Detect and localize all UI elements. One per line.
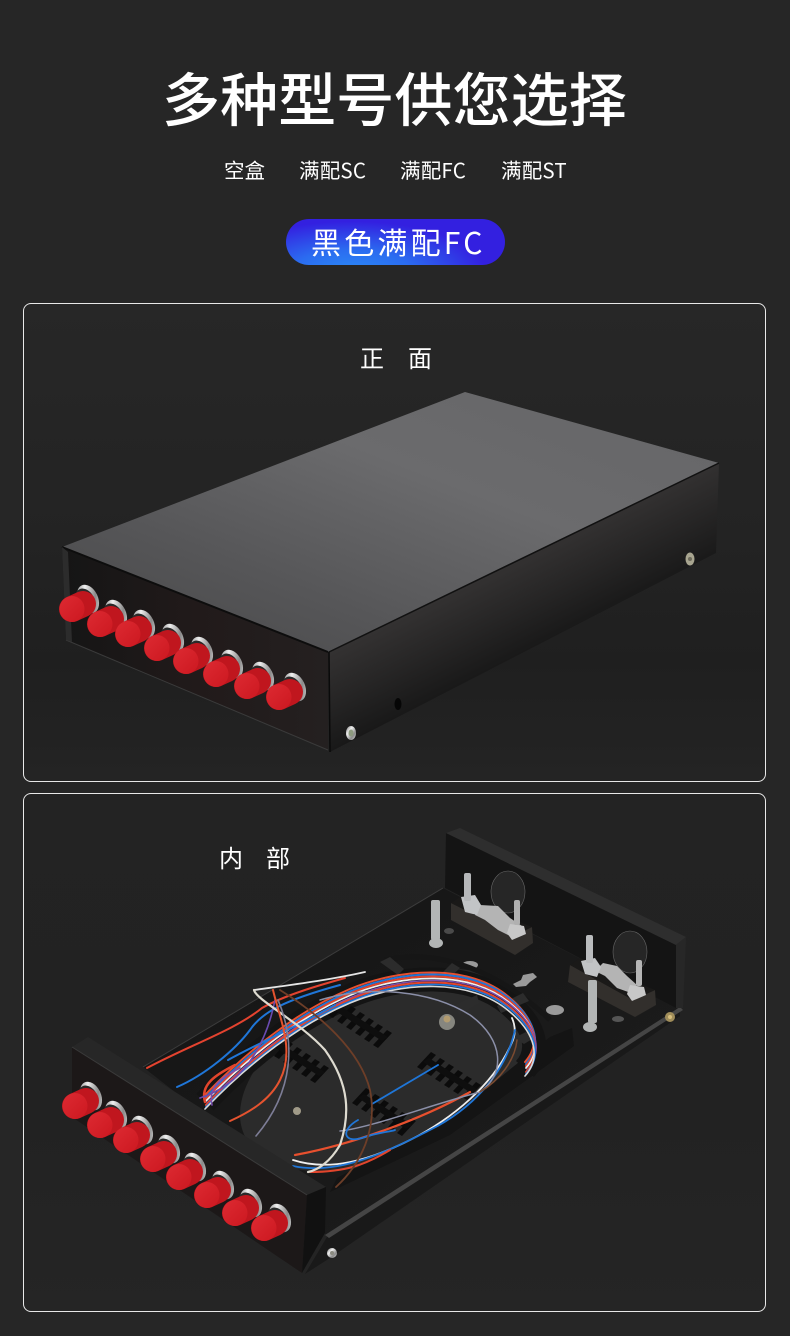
tray nut xyxy=(439,1014,455,1030)
red connector row xyxy=(62,1078,295,1241)
lower lip highlight xyxy=(325,1007,683,1238)
splice tray disc xyxy=(209,927,561,1213)
variant: ST: 满配ST xyxy=(501,154,567,184)
tray floor xyxy=(143,888,680,1237)
standoff bolts xyxy=(429,900,597,1032)
red connector row xyxy=(60,581,310,710)
screw rear xyxy=(686,552,694,566)
variant: FC: 满配FC xyxy=(400,154,466,184)
rear wall xyxy=(445,833,676,1008)
box right side xyxy=(329,463,719,752)
floor slots xyxy=(444,928,624,1022)
fibre bundle xyxy=(147,972,536,1187)
colour badge xyxy=(286,219,505,265)
outer side wall xyxy=(305,1010,680,1274)
panel: inside view xyxy=(23,793,766,1312)
hole xyxy=(394,698,402,710)
title: 多种型号供您选择 xyxy=(162,54,627,138)
knockout holes xyxy=(491,871,647,973)
splice combs xyxy=(265,1000,481,1136)
splice tray lower rail xyxy=(330,1028,574,1192)
screw rear xyxy=(665,1012,675,1022)
interior tray photo xyxy=(62,828,686,1274)
box front face xyxy=(62,547,328,750)
screw front xyxy=(327,1248,337,1258)
front plate xyxy=(72,1037,326,1273)
panel: front view xyxy=(23,303,766,782)
closed enclosure photo xyxy=(59,392,719,752)
box top face xyxy=(62,392,719,652)
tray tabs xyxy=(380,957,534,1044)
heading: front: 正 面 xyxy=(360,339,432,374)
clamp left xyxy=(451,873,533,955)
badge text: 黑色满配FC xyxy=(311,219,486,263)
variant: SC: 满配SC xyxy=(299,154,366,184)
fibre channel xyxy=(205,979,534,1102)
variant: empty: 空盒 xyxy=(224,154,265,184)
screw front xyxy=(346,726,356,740)
heading: inside: 内 部 xyxy=(219,839,290,874)
variant list xyxy=(224,154,567,184)
clamp right xyxy=(568,935,656,1017)
